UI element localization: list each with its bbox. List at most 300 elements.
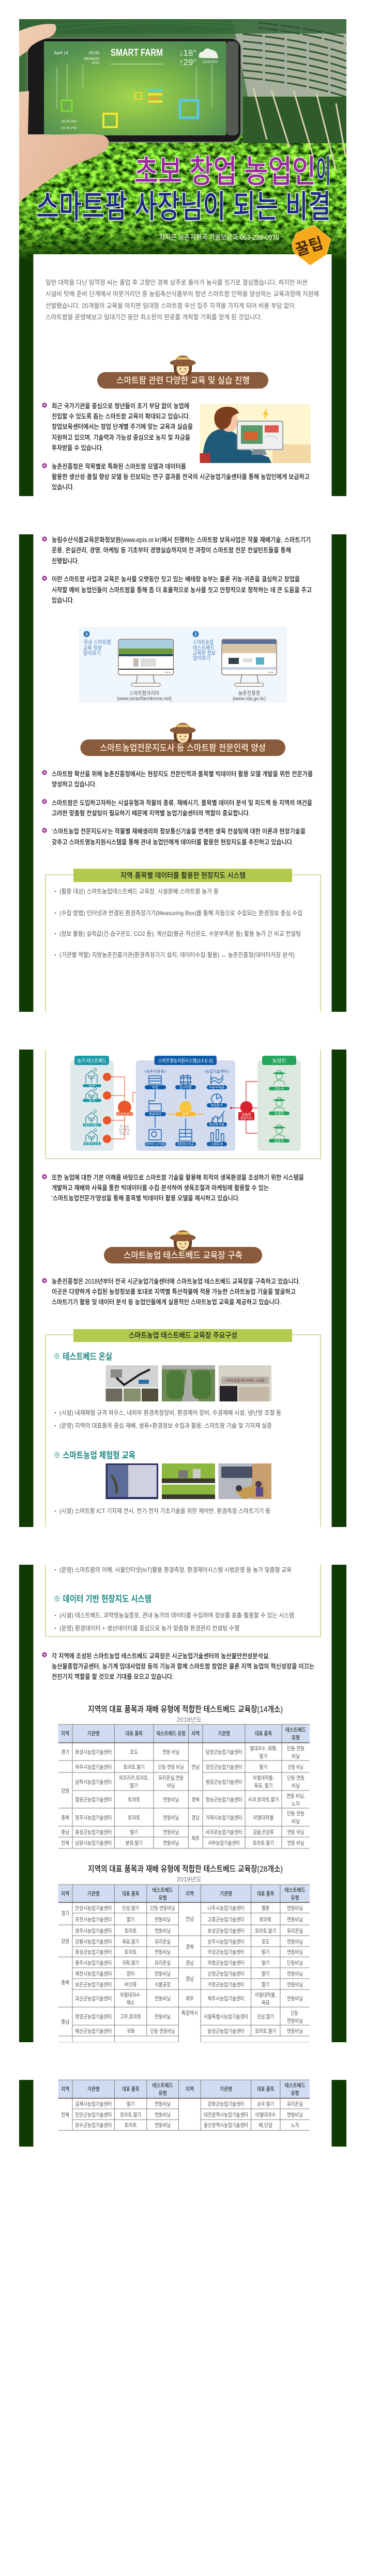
table: 2019 testbeds: 고흥군농업기술센터 (208, 1916, 244, 1923)
table: 2019 testbeds: 연동비닐 (155, 1971, 171, 1977)
bullet text: experts training: 스마트팜 확산을 위해 농촌진흥청에서는 현장지도 전문인력과 품목별 빅데이터 활용 모델 개발을 위한 전문가를 (52, 770, 313, 778)
panel: smart farming support system: 생산량구분 (209, 1122, 224, 1127)
panel: farms and testbeds: 과학영농실증포 (81, 1141, 103, 1146)
table: 2018 testbeds: 제주 (191, 1835, 200, 1842)
table: 2019 testbeds continued: 순무,딸기 (257, 2101, 274, 2107)
table: 2019 testbeds: 제천시농업기술센터 (75, 1970, 112, 1977)
label: left monitor caption: 국내 스마트팜 (83, 639, 111, 645)
table: 2019 testbeds: 토마토,딸기 (255, 2028, 276, 2034)
panel: smart farming support system: <농촌진흥청> (144, 1069, 166, 1074)
intro text (45, 279, 319, 321)
table: 2019 testbeds continued: 노지 (291, 2122, 299, 2128)
label: site names: 농촌진흥청 (238, 690, 260, 697)
table: 2019 testbeds: 딸기 (127, 1917, 135, 1923)
panel: smart farming support system: <농업기술센터> (204, 1069, 230, 1074)
table: 2019 testbeds: 유리온실 (155, 1939, 171, 1945)
label: site names: (www.rda.go.kr) (233, 696, 266, 702)
table: 2018 testbeds: 열대과수, 화훼, (250, 1746, 277, 1752)
bullet text: RDA research: 있습니다. (52, 484, 74, 491)
heading: smart farm experts: 스마트농업전문지도사 등 스마트팜 전문인력 양성 (100, 743, 266, 753)
list: field guidance details: (수집 방법) 인터넷과 연결된 환경측정기기(Measuring Box)를 통해 자동으로 수집되는 환경정보 중심 수집 (59, 909, 302, 917)
sensors and connectors: 습구온도 (119, 1128, 131, 1132)
panel: farms and testbeds: 농가·테스트베드 (78, 1058, 107, 1064)
list: hands-on details: (운영) 스마트팜의 이해, 사물인터넷(IoT)활용 환경측정, 환경제어시스템 시범운영 등 농가 맞춤형 교육 (59, 1566, 292, 1574)
table: 2019 testbeds: 괴산군농업기술센터 (75, 1995, 112, 2002)
bullet text: national education: 최근 국가기관을 중심으로 청년들이 초기 부담 없이 농업에 (52, 403, 189, 410)
intro text: 스마트팜을 운영해보고 임대기간 동안 최소한의 판로를 개척할 기회를 얻게 된 것입니다. (45, 314, 262, 321)
subheading: data-based guidance: ※ 데이터 기반 현장지도 시스템 (53, 1594, 151, 1604)
bullet text: veteran and prospective farmers: 시작할 예비 농업인들이 스마트팜을 통해 좀 더 효율적으로 농사를 짓고 안정적으로 정착하는 데 큰 도움을 주고 (52, 586, 312, 594)
panel: smart farming support system: 알고리즘 (179, 1085, 192, 1089)
table: 2018 testbeds: 화성시농업기술센터 (75, 1749, 112, 1755)
table: 2019 testbeds: 경남 (186, 1976, 194, 1982)
table: 2019 testbeds: 고추,토마토 (120, 2014, 141, 2020)
bullet text: experts training: 양성하고 있습니다. (52, 781, 97, 788)
table: 2019 testbeds: 충주시농업기술센터 (75, 1960, 112, 1966)
table: 2018 testbeds: 연동비닐 (163, 1815, 179, 1821)
icon: smartphone: MONDAY (84, 57, 100, 61)
table: 2019 testbeds: 딸기 (262, 1949, 270, 1955)
hero image: smart farm phone in greenhouse (19, 19, 346, 259)
title: 초보 창업 농업인 (134, 154, 316, 190)
table: 2019 testbeds: 포도 (262, 1939, 270, 1945)
table: 2019 testbeds: 딸기 (262, 1971, 270, 1977)
page columns: dark green side bars (19, 259, 346, 2147)
table: 2019 testbeds: 딸기 (262, 1960, 270, 1966)
table: 2019 testbeds: 유형 (159, 1894, 167, 1901)
table: 2018 testbeds: 단동 비닐 (288, 1764, 303, 1770)
list: greenhouse details (55, 1409, 281, 1429)
table: 2018 testbeds: 청송군농업기술센터 (206, 1796, 242, 1803)
diagram: smart farming support system flow (70, 1056, 301, 1151)
list: data guidance details: (시설) 테스트베드, 과학영농실증포, 관내 농가의 데이터를 수집하여 정보를 표출·활용할 수 있는 시스템 (59, 1612, 294, 1619)
table: 2019 testbeds: 경북 (186, 1943, 194, 1950)
table: 2018 testbeds: 연동 비닐 (162, 1749, 179, 1755)
table: 2018 testbeds: 청주시농업기술센터 (75, 1814, 112, 1821)
icon: smartphone: April 14 (54, 51, 69, 55)
table: 2019 testbeds: 인삼,딸기 (122, 1905, 139, 1911)
heading: smart farm experts (80, 723, 285, 756)
table: 2019 testbeds continued: 진안군농업기술센터 (75, 2111, 112, 2118)
table: 2018 testbeds: 파프리카,토마토, (119, 1775, 149, 1781)
bullet text: veteran and prospective farmers: 이런 스마트팜 사업과 교육은 농사를 오랫동안 짓고 있는 베테랑 농부는 물론 귀농·귀촌을 결심하고 창업을 (52, 576, 300, 583)
label: right monitor caption: 교육장 정보 (193, 650, 216, 656)
bullet text: tailored consulting (42, 799, 312, 817)
table: 2019 testbeds: 달성군농업기술센터 (208, 2028, 244, 2034)
sensors and connectors: CO₂ 등 (120, 1132, 130, 1136)
panel: education websites on monitors (79, 627, 287, 703)
table: 2019 testbeds: 강원 (61, 1938, 69, 1945)
table: 2018 testbeds: 기관명 (218, 1731, 230, 1737)
table: 2019 testbeds continued: 지역 (186, 2086, 194, 2092)
bullet text: regional innovation bases: 농산물종합가공센터, 농기계 임대사업장 등의 기능과 함께 스마트팜 창업은 물론 지역 농업의 혁신성장을 이끄는 (52, 1662, 314, 1670)
icon: honeycomb badge (292, 225, 331, 265)
list: greenhouse details: (시설) 내재해형 규격 하우스, 내외부 환경측정장비, 환경제어 장비, 수경재배 시설, 냉난방 조절 등 (59, 1409, 281, 1416)
table: 2018 testbeds: 노지 (292, 1801, 300, 1807)
table: 2019 testbeds: 연동비닐 (287, 2028, 303, 2034)
bullet text: RDA research (42, 462, 310, 491)
table: 2019 testbeds: 기관명 (87, 1891, 100, 1897)
table: 2019 testbeds: 의성군농업기술센터 (208, 1949, 244, 1955)
bullet text: veteran and prospective farmers (42, 576, 312, 604)
heading: testbed training centers: 스마트농업 테스트베드 교육장 구축 (124, 1251, 242, 1260)
table: 2019 testbeds: 유형 (291, 1894, 299, 1901)
table: 2019 testbeds continued: 배,단감 (258, 2122, 272, 2128)
table: 2018 testbeds: 토마토 (128, 1797, 141, 1803)
table: 2019 testbeds continued: 연동비닐 (155, 2101, 171, 2107)
table: 2019 testbeds continued: 테스트베드 (153, 2083, 173, 2089)
table: 2019 testbeds: 지역 (186, 1890, 194, 1897)
table: 2019 testbeds: 안성시농업기술센터 (75, 1905, 112, 1911)
table: 2019 testbeds: 연동비닐 (287, 1996, 303, 2002)
table: 2019 testbeds (58, 1885, 310, 2042)
label: site names: (www.smartfarmkorea.net) (117, 696, 172, 702)
bullet text: national education: 창업보육센터에서는 창업 단계별 주기에 맞는 교육과 실습을 (52, 423, 193, 430)
table: 2018 testbeds: 토마토 (128, 1815, 141, 1821)
label: right monitor caption: 스마트농업 (193, 639, 214, 645)
table: 2019 testbeds: 단동·연동비닐 (150, 2028, 175, 2034)
bullet text: testbed construction: 농촌진흥청은 2018년부터 전국 시군농업기술센터에 스마트농업 테스트베드 교육장을 구축하고 있습니다. (52, 1277, 300, 1285)
table: 2019 testbeds: 딸기 (262, 1982, 270, 1988)
table: 2019 testbeds: 국화,딸기 (122, 1960, 139, 1966)
table: 2018 testbeds: 육묘, 딸기 (254, 1783, 273, 1789)
bullet text: EPIS incubation: 운용, 온실관리, 경영, 마케팅 등 기초부터 경영실습까지의 전 과정이 스마트팜 전문 컨설턴트들을 통해 (52, 547, 291, 554)
table: 2019 testbeds: 특광역시 (181, 2010, 198, 2016)
table: 2019 testbeds: 유리온실 (287, 1928, 303, 1934)
heading band: field guidance system (73, 869, 292, 882)
table: 2018 testbeds: 충북 (61, 1815, 70, 1821)
panel: farms and testbeds: 농가 (89, 1083, 95, 1088)
label: left monitor caption (83, 639, 111, 656)
table: 2018 testbeds: 강원 (61, 1788, 69, 1794)
table: 2018 testbeds: 토마토,딸기 (253, 1840, 274, 1846)
table: 2019 testbeds: 보성군농업기술센터 (208, 1927, 244, 1934)
table: 2019 testbeds: 보은군농업기술센터 (75, 1981, 112, 1988)
table: 2018 testbeds: 토마토,딸기 (124, 1764, 145, 1770)
icon: honeycomb badge: 꿀팁 (294, 235, 325, 259)
table: 2019 testbeds: 채소 (127, 2000, 135, 2006)
list: hands-on details: (시설) 스마트팜 ICT 기자재 전시, 전기·전자 기초기술을 위한 제어반, 환경측정 스마트기기 등 (59, 1507, 270, 1515)
table: 2019 testbeds continued: 기관명 (87, 2086, 100, 2092)
table: 2019 testbeds continued: 테스트베드 (284, 2083, 306, 2089)
table: 2019 testbeds continued: 토마토 (125, 2122, 137, 2128)
label: right monitor caption: 테스트베드 (193, 645, 215, 651)
table: 2019 testbeds: 연동비닐 (287, 2018, 303, 2024)
table: 2019 testbeds continued (58, 2080, 310, 2130)
table: 2019 testbeds: 토마토 (125, 1928, 137, 1934)
heading: education and practice (97, 356, 268, 389)
panel: smart farming support system: 데이터 비교 (177, 1142, 194, 1146)
table: 2018 testbeds: 철원군농업기술센터 (75, 1796, 112, 1803)
table: 2019 testbeds continued: 울산광역시농업기술센터 (204, 2122, 248, 2128)
bullet text: big data experts: '스마트농업전문가'양성을 통해 품목별 빅데이터 활용 모델을 제시하고 있습니다. (52, 1194, 240, 1202)
table: 2019 testbeds: 기관명 (220, 1891, 232, 1897)
table: 2018 testbeds: 대표 품목 (126, 1731, 143, 1737)
table: 2019 testbeds continued: 전북 (61, 2112, 70, 2118)
list: field guidance details: (기관별 역할) 지방농촌진흥기관(환경측정기기 설치, 데이터수집·활용) ↔ 농촌진흥청(데이터저장·분석) (59, 951, 295, 959)
table: 2019 testbeds continued: 대표 품목 (122, 2086, 139, 2092)
table: 2019 testbeds: 연동비닐 (287, 1917, 303, 1923)
table: 2019 testbeds: 단동- (291, 2010, 299, 2016)
table: 2018 testbeds: 테스트베드 유형 (157, 1730, 186, 1737)
table: 2018 testbeds: 삼척시농업기술센터 (75, 1779, 112, 1785)
table: 2019 testbeds: 육묘 (262, 2000, 270, 2006)
list: data guidance details (55, 1612, 294, 1632)
panel: farmers: 농업인 (272, 1058, 286, 1064)
table title: 2018 testbeds: 지역의 대표 품목과 재배 유형에 적합한 테스트베드 교육장(14개소) (88, 1705, 283, 1714)
bullet text: regional innovation bases: 각 지역에 조성된 스마트농업 테스트베드 교육장은 시군농업기술센터의 농산물안전성분석실, (52, 1653, 270, 1660)
intro text: 일반 대학을 다닌 임꺽정 씨는 졸업 후 고향인 경북 상주로 돌아가 농사를 짓기로 결심했습니다. 하지만 비싼 (45, 279, 308, 286)
table: 2018 testbeds: 딸기 (130, 1783, 138, 1789)
bullet text: EPIS incubation: 농림수산식품교육문화정보원(www.epis.or.kr)에서 진행하는 스마트팜 보육사업은 작물 재배기술, 스마트기기 (52, 536, 311, 544)
table: 2018 testbeds: 서부농업기술센터 (208, 1840, 240, 1846)
sensors and connectors: 환경측정기 (117, 1112, 132, 1116)
table: 2019 testbeds: 연동비닐 (155, 1917, 171, 1923)
table: 2019 testbeds: 나주시농업기술센터 (208, 1905, 244, 1911)
table: 2019 testbeds: 의령군농업기술센터 (208, 1960, 244, 1966)
table: 2019 testbeds continued: 강화군농업기술센터 (208, 2101, 244, 2107)
table: 2019 testbeds: 육묘,딸기 (122, 1939, 139, 1945)
table: 2019 testbeds: 서울특별시농업기술센터 (204, 2013, 248, 2020)
icon: smartphone: CLOUDY (203, 60, 218, 64)
bullet text: big data experts (42, 1174, 304, 1202)
heading: education and practice: 스마트팜 관련 다양한 교육 및 실습 진행 (116, 376, 250, 385)
table: 2019 testbeds: 원주시농업기술센터 (75, 1927, 112, 1934)
bullet text: testbed construction: 스마트기기 활용 및 데이터 분석 등 농업인들에게 실용적인 스마트농업 교육을 제공하고 있습니다. (52, 1298, 281, 1306)
table: 2018 testbeds: 지역 (61, 1730, 69, 1737)
bullet text: testbed construction: 이곳은 다양하게 수집된 농장정보를 토대로 지역별 특산작물에 적용 가능한 스마트농업 기술을 발굴하고 (52, 1288, 296, 1295)
table: 2018 testbeds: 비닐 (167, 1783, 175, 1789)
table: 2019 testbeds continued: 토마토,딸기 (120, 2112, 141, 2118)
label: left monitor caption: 알아보기 (83, 650, 101, 656)
icon: smartphone: 00:00 AM (61, 120, 77, 124)
table: 2019 testbeds: 청양군농업기술센터 (75, 2013, 112, 2020)
bullet text: regional innovation bases (42, 1652, 314, 1680)
icon: smartphone (27, 38, 241, 142)
title: 이 (316, 154, 331, 190)
table: 2019 testbeds continued: 연동비닐 (287, 2112, 303, 2118)
illustration: man at computer (200, 404, 311, 463)
panel: farms and testbeds: 테스트베드 (84, 1122, 100, 1127)
table: 2019 testbeds: 테스트베드 (153, 1887, 173, 1893)
list: field guidance details: (활용 대상) 스마트농업테스트베드 교육장, 시설원예·스마트팜 농가 등 (59, 888, 219, 895)
panel: smart farming support system: 수집 (152, 1085, 158, 1089)
table: 2018 testbeds (58, 1724, 310, 1848)
table: 2018 testbeds: 경기 (61, 1749, 69, 1755)
icon: info left (84, 631, 90, 637)
table: 2019 testbeds continued: 유리온실 (287, 2101, 303, 2107)
title (36, 154, 331, 225)
icon: hand holding phone (19, 24, 109, 203)
table: 2018 testbeds: 단동·연동 (287, 1811, 305, 1817)
table: 2019 testbeds: 단동·연동비닐 (150, 1905, 175, 1911)
list: hands-on details (55, 1507, 292, 1574)
icon: monitor rda (222, 639, 277, 686)
table: 2018 testbeds: 영광군농업기술센터 (206, 1779, 242, 1785)
table: 2018 testbeds: 전남 (191, 1764, 200, 1770)
table: 2018 testbeds: 사과,토마토,딸기 (248, 1797, 279, 1803)
bullet text: EPIS incubation: 진행됩니다. (52, 557, 79, 565)
table: 2019 testbeds: 경남 (186, 1960, 194, 1966)
bullet text: national education: 투자받을 수 있습니다. (52, 444, 103, 452)
intro text: 선발됐습니다. 20개월의 교육을 마치면 임대형 스마트팜 우선 입주 자격을 가지게 되어 비용 부담 없이 (45, 302, 295, 310)
bullet text: EPIS incubation (42, 536, 311, 565)
bullet text: regional innovation bases: 전진기지 역할을 할 것으로 기대를 모으고 있습니다. (52, 1673, 174, 1680)
table: 2019 testbeds: 전남 (186, 1916, 194, 1922)
panel: farms and testbeds (70, 1056, 114, 1151)
table: 2018 testbeds: 담양군농업기술센터 (206, 1749, 242, 1755)
label: site names (117, 690, 266, 702)
table: 2019 testbeds: 인삼,딸기 (257, 2014, 274, 2020)
table: 2019 testbeds: 단동비닐 (287, 1960, 303, 1966)
table: 2018 testbeds: 지역 (191, 1730, 200, 1737)
table: 2019 testbeds: 연동비닐 (155, 2014, 171, 2020)
table: 2019 testbeds: 테스트베드 (284, 1887, 306, 1893)
panel: smart farming support system: 분석 (182, 1112, 189, 1116)
panel: smart farming support system: 그래프/표 (210, 1142, 223, 1146)
table: 2019 testbeds continued: 유형 (159, 2090, 167, 2096)
label: right monitor caption: 알아보기 (193, 655, 210, 661)
table: 2018 testbeds: 감귤,만감류 (253, 1829, 274, 1835)
table: 2019 testbeds: 연동비닐 (287, 1982, 303, 1988)
table: 2018 testbeds: 파주시농업기술센터 (75, 1764, 112, 1770)
table: 2019 testbeds continued: 지역 (61, 2086, 69, 2092)
table: 2019 testbeds: 연동비닐 (287, 1939, 303, 1945)
list: greenhouse details: (운영) 지역의 대표품목 중심 재배, 생육+환경정보 수집과 활용, 스마트팜 기술 및 기자재 실증 (59, 1422, 272, 1429)
panel: farmers (257, 1056, 301, 1151)
label: right monitor caption (193, 639, 216, 661)
table: 2018 testbeds: 분화,딸기 (126, 1840, 143, 1846)
panel frame: testbed composition (45, 1335, 321, 1637)
table: 2018 testbeds: 비닐 (292, 1818, 300, 1825)
label: site names: 스마트팜코리아 (129, 690, 159, 697)
table: 2019 testbeds: 유리온실 (155, 1960, 171, 1966)
table title: 2019 testbeds: 2019년도 (177, 1876, 202, 1883)
table: 2019 testbeds: 연동비닐 (287, 1949, 303, 1955)
bullet text: big data experts: 개발하고 재배와 사육을 통한 빅데이터를 수집·분석하여 생육조절과 마케팅에 활용할 수 있는 (52, 1184, 269, 1192)
table: 2019 testbeds: 연동비닐 (155, 1949, 171, 1955)
author credit: 차지은 농촌지원국 기술보급과 063-238-0979 (159, 233, 279, 241)
arrow group: consulting delivery (230, 1080, 266, 1135)
list: data guidance details: (운영) 환경데이터 + 생산데이터를 중심으로 농가 맞춤형 환경관리 컨설팅 수행 (59, 1624, 239, 1632)
bullet text: tailored consulting: 스마트팜은 도입하고자하는 시설유형과 작물의 종류, 재배시기, 품목별 데이터 분석 및 피드백 등 지역의 여건을 (52, 799, 312, 807)
table: 2018 testbeds: 남원시농업기술센터 (75, 1840, 112, 1846)
table: 2018 testbeds: 서귀포농업기술센터 (206, 1829, 242, 1835)
table: 2019 testbeds: 제주시농업기술센터 (208, 1995, 244, 2002)
bullet text: tailored consulting: 고려한 맞춤형 컨설팅이 필요하기 때문에 지역별 농업기술센터의 역할이 중요합니다. (52, 809, 250, 817)
panel: farmers: 전문가 (275, 1138, 284, 1143)
table: 2018 testbeds: 딸기 (260, 1764, 268, 1770)
icon: monitor smartfarmkorea (118, 639, 174, 686)
table: 2019 testbeds continued: 아열대과수 (255, 2112, 276, 2118)
table: 2019 testbeds: 지역 (61, 1890, 69, 1897)
panel: smart farming support system: 데이터 시각화 (145, 1142, 165, 1146)
table: 2018 testbeds: 유형 (292, 1734, 300, 1741)
bullet text: RDA research: 활용한 생산성·품질 향상 모델 등 진보되는 연구 결과를 전국의 시군농업기술센터를 통해 농업인에게 보급하고 (52, 473, 310, 481)
bullet text: national education: 진입할 수 있도록 돕는 스마트팜 교육이 확대되고 있습니다. (52, 412, 190, 420)
table: 2018 testbeds: 연동비닐 (163, 1829, 179, 1835)
icon: smartphone: ↑29° (179, 57, 196, 67)
panel: smart farming support system: 계산분석 (210, 1103, 223, 1107)
table: 2019 testbeds: 연동비닐 (287, 1905, 303, 1911)
icon: info right (192, 631, 199, 637)
table: 2018 testbeds: 포도 (130, 1749, 139, 1755)
table: 2019 testbeds continued: 연동비닐 (155, 2122, 171, 2128)
table: 2019 testbeds: 연동비닐 (155, 1928, 171, 1934)
table: 2018 testbeds: 단동·연동 (287, 1746, 305, 1752)
bullet text: testbed construction (42, 1277, 300, 1306)
table: 2019 testbeds: 아열대작물, (255, 1992, 276, 1998)
icon: smartphone: SMART FARM (111, 48, 163, 58)
bullet text: national education (42, 403, 193, 452)
table: 2019 testbeds: 연동비닐 (155, 1996, 171, 2002)
panel: smart farming support system: 정보처리 (149, 1112, 161, 1116)
bullet text: big data experts: 또한 농업에 대한 기본 이해를 바탕으로 스마트팜 기술을 활용해 최적의 생육환경을 조성하기 위한 시스템을 (52, 1174, 304, 1181)
table: 2019 testbeds: 버섯류 (125, 1982, 137, 1988)
table: 2018 testbeds: 연동 비닐 (287, 1840, 304, 1846)
table: 2019 testbeds: 토마토,딸기 (255, 1928, 276, 1934)
sensors and connectors (103, 1073, 144, 1143)
table: 2019 testbeds: 연동비닐 (287, 1971, 303, 1977)
table: 2018 testbeds: 아열대작물, (253, 1775, 274, 1781)
table: 2019 testbeds continued: 기관명 (220, 2086, 232, 2092)
bullet text: national education: 지원하고 있으며, 기술력과 가능성 중심으로 농지 및 자금을 (52, 434, 190, 441)
list: field guidance details (55, 888, 302, 959)
table: 2018 testbeds: 홍성군농업기술센터 (75, 1829, 112, 1835)
table: 2018 testbeds: 유리온실,연동 (158, 1775, 184, 1781)
table: 2018 testbeds: 딸기 (260, 1753, 268, 1760)
bullet text: veteran and prospective farmers: 있습니다. (52, 597, 74, 604)
table: 2018 testbeds: 거제시농업기술센터 (206, 1814, 242, 1821)
table: 2019 testbeds continued: 대표 품목 (257, 2086, 274, 2092)
table: 2019 testbeds continued: 대전광역시농업기술센터 (204, 2111, 248, 2118)
table: 2019 testbeds continued: 딸기 (127, 2101, 135, 2107)
bullet text: experts training (42, 770, 313, 788)
heading: testbed training centers (104, 1230, 262, 1263)
table: 2019 testbeds: 제주 (186, 1996, 194, 2002)
sensors and connectors: 온·습도 (120, 1124, 130, 1129)
table: 2019 testbeds: 토마토 (125, 1949, 137, 1955)
bullet text: RDA research: 농촌진흥청은 작목별로 특화된 스마트팜 모델과 데이터를 (52, 462, 186, 470)
panel: smart farming support system: 스마트영농지원시스템(S.F.E.S) (158, 1058, 213, 1064)
table: 2018 testbeds: 강진군농업기술센터 (206, 1764, 242, 1770)
table: 2019 testbeds: 산청군농업기술센터 (208, 1970, 244, 1977)
table title: 2018 testbeds: 2018년도 (177, 1716, 202, 1723)
panel frame: field guidance system (45, 875, 321, 1159)
panel: farmers: 농업인 (275, 1111, 284, 1116)
panel: smart farming support system: 수분부족분 (209, 1085, 224, 1089)
table title: 2019 testbeds: 지역의 대표 품목과 재배 유형에 적합한 테스트베드 교육장(28개소) (88, 1864, 283, 1874)
table: 2018 testbeds: 연동 비닐, (286, 1793, 305, 1799)
icon: smartphone: 05:00 (89, 51, 100, 55)
icon: smartphone: ↓18° (179, 48, 196, 58)
photos: hands-on education (105, 1463, 271, 1499)
table: 2018 testbeds: 비닐 (292, 1783, 300, 1789)
table: 2019 testbeds: 포천시농업기술센터 (75, 1916, 112, 1923)
table: 2019 testbeds: 국화 (127, 2028, 135, 2034)
panel: smart farming support system (136, 1056, 235, 1151)
panel: farms and testbeds: 농가 (89, 1098, 95, 1102)
bullet text: field instructors (42, 827, 306, 846)
table: 2019 testbeds: 대표 품목 (122, 1891, 139, 1897)
table: 2019 testbeds continued: 유형 (291, 2090, 299, 2096)
photos: greenhouse equipment (105, 1365, 271, 1401)
subheading: hands-on education: ※ 스마트농업 체험형 교육 (53, 1451, 135, 1460)
table: 2019 testbeds: 충북 (61, 1980, 70, 1986)
table title: 2019 testbeds (88, 1864, 283, 1883)
table: 2018 testbeds: 테스트베드 (285, 1727, 306, 1733)
heading band: testbed composition: 스마트농업 테스트베드 교육장 주요구성 (129, 1331, 237, 1339)
